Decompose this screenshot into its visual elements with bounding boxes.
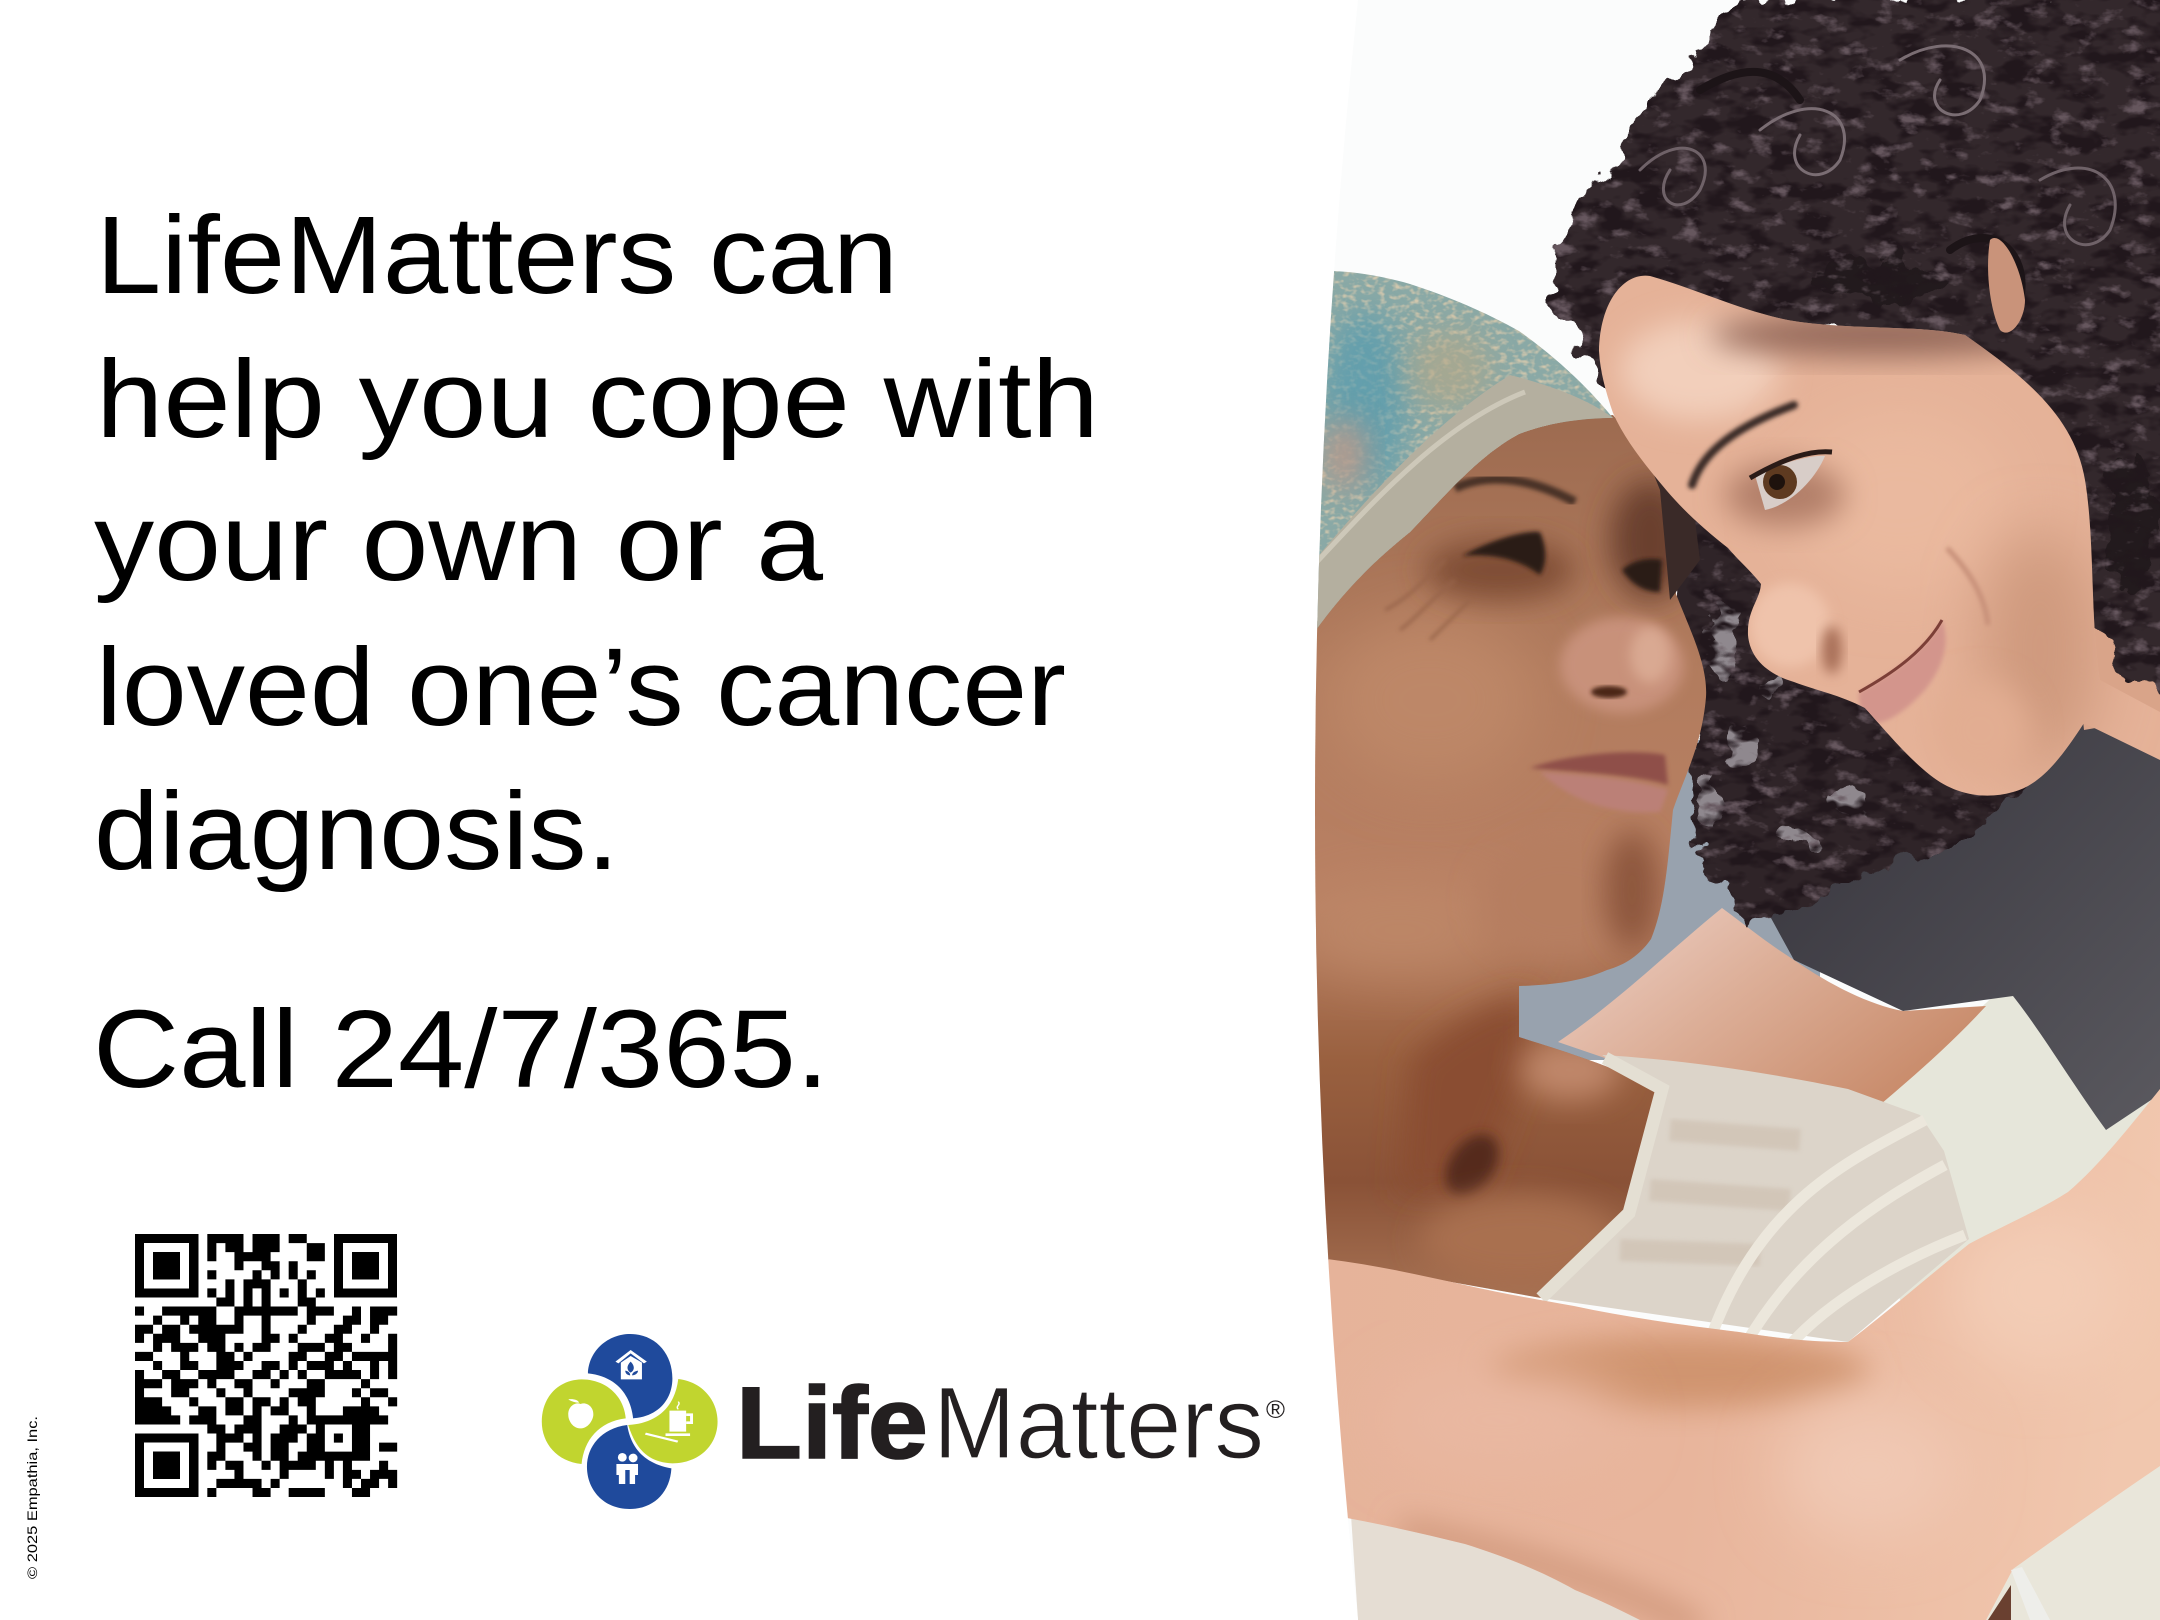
icon: house xyxy=(615,1350,647,1379)
LifeMatters logo xyxy=(542,1334,1286,1509)
headline: help you cope with xyxy=(96,338,1099,461)
copyright notice: © 2025 Empathia, Inc. xyxy=(24,1416,40,1579)
logo wordmark: Matters xyxy=(933,1366,1264,1480)
younger woman hair xyxy=(1552,0,2160,690)
icon: coffee cup xyxy=(645,1402,693,1443)
younger woman lips xyxy=(1859,620,1946,723)
icon: people xyxy=(616,1453,638,1484)
logo wordmark: Life xyxy=(736,1366,928,1480)
headline: diagnosis. xyxy=(94,770,619,893)
icon: apple xyxy=(568,1399,593,1428)
shirt strap at wrist xyxy=(1988,1567,2050,1620)
shadow between the two foreheads xyxy=(1654,476,1700,600)
logo wordmark xyxy=(736,1366,1286,1480)
younger woman eye socket xyxy=(1725,463,1845,527)
headline: your own or a xyxy=(94,481,824,604)
elder woman shirt xyxy=(1350,1055,1969,1620)
elder lips xyxy=(1530,752,1668,785)
younger woman brow xyxy=(1692,405,1794,485)
younger woman nose xyxy=(1750,583,1830,667)
headline xyxy=(94,194,1099,893)
neck skin behind hair xyxy=(2083,628,2160,730)
headline: loved one’s cancer xyxy=(96,626,1066,749)
elder woman body and face xyxy=(1315,415,1706,1298)
elder eyes xyxy=(1462,532,1545,575)
elder brow xyxy=(1455,479,1575,502)
elder wrinkles xyxy=(1386,585,1464,640)
logo wordmark: ® xyxy=(1266,1396,1286,1424)
elder eye area shadow xyxy=(1425,540,1575,600)
younger woman eye xyxy=(1750,452,1832,510)
front embracing arm xyxy=(1320,1080,2160,1620)
far arm xyxy=(1558,908,1986,1104)
QR code xyxy=(135,1234,397,1497)
younger woman face xyxy=(1590,260,2160,820)
grey shirt xyxy=(1760,700,2160,1130)
younger woman ear xyxy=(1988,238,2025,333)
hair curl strands xyxy=(1640,46,2115,300)
elder nose xyxy=(1560,617,1684,713)
photo background xyxy=(1519,740,2160,1620)
photo: two women embracing xyxy=(1270,0,2160,1620)
call to action: Call 24/7/365. xyxy=(93,988,829,1111)
lower hair between faces xyxy=(1676,520,2026,928)
logo emblem xyxy=(542,1334,718,1509)
headline: LifeMatters can xyxy=(96,194,898,317)
elder woman scarf xyxy=(1317,271,1613,628)
